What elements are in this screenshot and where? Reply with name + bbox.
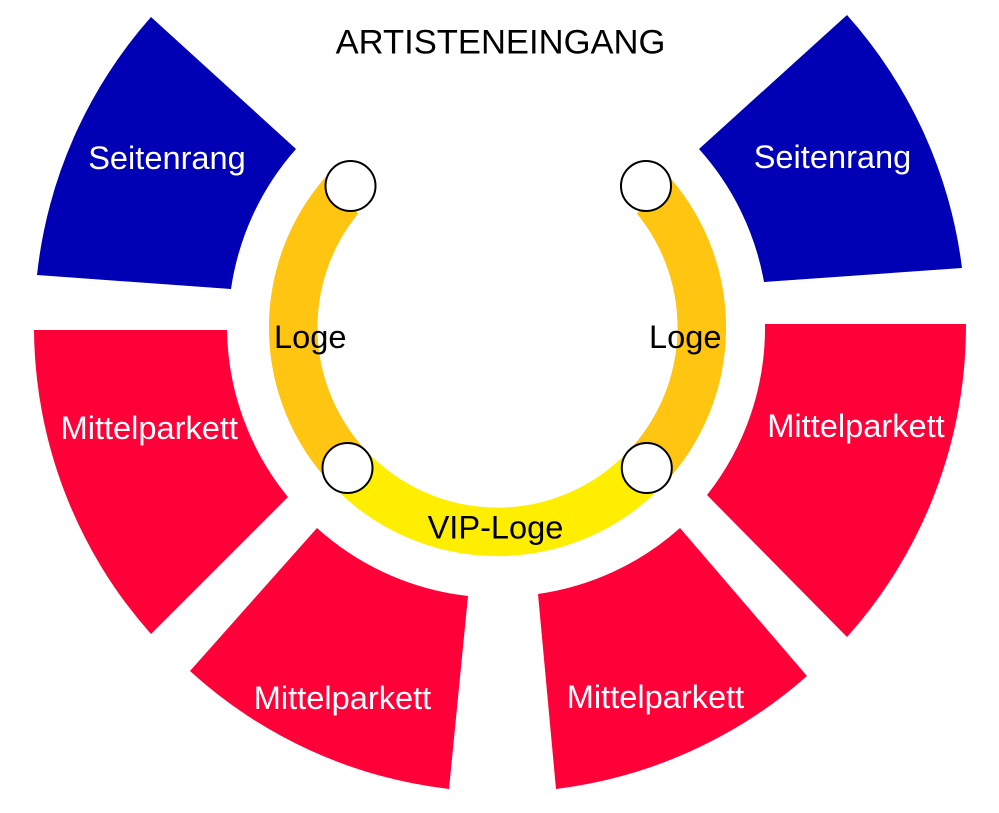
section: left Mittelparkett xyxy=(34,330,288,634)
section: right Mittelparkett: Mittelparkett xyxy=(767,407,945,444)
ring: left Loge xyxy=(269,177,366,484)
section: right Seitenrang: Seitenrang xyxy=(754,138,911,175)
section: left Mittelparkett: Mittelparkett xyxy=(61,409,238,446)
section: left Seitenrang: Seitenrang xyxy=(88,139,246,176)
section: lower left Mittelparkett: Mittelparkett xyxy=(254,679,431,716)
section: lower right Mittelparkett xyxy=(538,528,807,789)
ring: left Loge: Loge xyxy=(274,318,347,355)
section: lower right Mittelparkett: Mittelparkett xyxy=(567,678,744,715)
marker: upper right circle xyxy=(621,161,671,211)
section: right Mittelparkett xyxy=(707,324,966,637)
section: lower left Mittelparkett xyxy=(190,528,468,789)
ring: VIP-Loge xyxy=(331,451,664,556)
marker: lower left circle xyxy=(322,443,372,493)
marker: upper left circle xyxy=(326,161,376,211)
ring: VIP-Loge: VIP-Loge xyxy=(428,508,563,545)
section: right Seitenrang xyxy=(699,15,962,282)
ring: right Loge: Loge xyxy=(649,318,722,355)
marker: lower right circle xyxy=(622,443,672,493)
title: ARTISTENEINGANG xyxy=(336,24,665,62)
ring: right Loge xyxy=(629,177,726,484)
section: left Seitenrang xyxy=(37,17,296,289)
